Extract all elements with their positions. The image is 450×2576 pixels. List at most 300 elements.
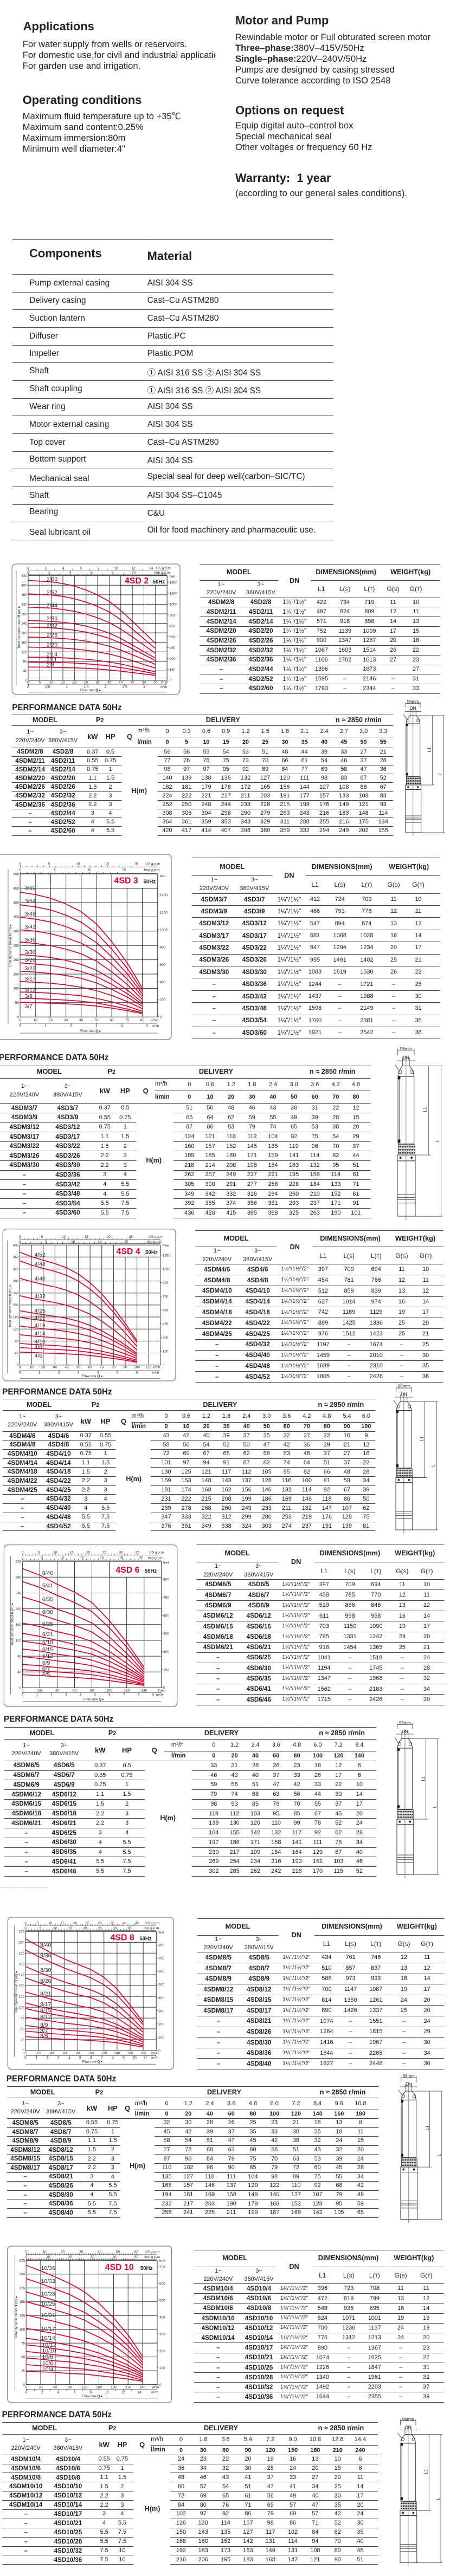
table: 4SD 4 model dimensions and weight: – [400, 1373, 403, 1380]
table: 4SD 10 performance data: 5.5 [118, 2520, 126, 2526]
table: 4SD 10 performance data: 35 [335, 2502, 341, 2508]
table: 4SD 3 performance data: 249 [226, 1171, 236, 1178]
table: 4SD 8 performance data: 51 [293, 2146, 299, 2153]
chart: 4SD 2 performance curves: 5 [38, 681, 41, 685]
table: 4SD 3 performance data: 195 [289, 1171, 299, 1178]
table: 4SD 4 performance data: 3 [104, 1477, 107, 1484]
chart: 4SD 10 performance curves: 4 [57, 2391, 60, 2395]
chart: 4SD 10 performance curves: 10/36 [41, 2266, 55, 2272]
table: 4SD 4 performance data: 4SDM4/25 [8, 1487, 37, 1494]
table: 4SD 10 performance data: 1.5 [118, 2474, 126, 2481]
table: 4SD 8 performance data: 75 [249, 2156, 256, 2162]
table: 4SD 10 performance data: 7.5 [100, 2547, 108, 2554]
table: 4SD 4 model dimensions and weight: 1336 [370, 1320, 383, 1326]
pump drawing: 4SD 6: L [433, 1805, 437, 1808]
table: 4SD 3 performance data: 133 [331, 1181, 340, 1188]
table: 4SD 8 model dimensions and weight: 510 [322, 1965, 331, 1971]
table: 4SD 10 model dimensions and weight: 4SD10/6 [247, 2295, 271, 2302]
table: 4SD 3 model dimensions and weight: 681 [310, 932, 320, 939]
table: 4SD 2 performance data: 55 [203, 749, 210, 755]
table: 4SD 3 performance data: 12 [352, 1105, 359, 1111]
chart: 4SD 4 performance curves: 4/32 [35, 1294, 46, 1300]
text block: applications: For water supply from wells or reservoirs. [23, 39, 187, 49]
table: 4SD 10 performance data: 4SD10/36 [54, 2556, 82, 2564]
chart: 4SD 10 performance curves: 200 [19, 2273, 25, 2276]
table: 4SD 8 performance data: 75 [314, 2173, 321, 2180]
chart: 4SD 2 performance curves: 2/52 [47, 590, 57, 596]
table: 4SD 6 performance data: kW [95, 1746, 105, 1754]
label: H(m) for 4SD 2: H(m) [131, 787, 147, 795]
chart: 4SD 2 performance curves: 1 [66, 685, 68, 689]
chart: 4SD 3 performance curves: 20 [49, 1018, 53, 1022]
table: 4SD 10 performance data: 20 [245, 2456, 252, 2462]
table: 4SD 4 performance data: kW [81, 1417, 91, 1425]
table: 4SD 10 performance data: P2 [108, 2424, 116, 2432]
table: 4SD 8 performance data: 107 [313, 2191, 323, 2198]
chart: 4SD 6 performance curves: 5 [94, 1693, 96, 1697]
table: 4SD 6 performance data: 158 [271, 1839, 281, 1846]
table: 4SD 8 model dimensions and weight: 3~ [255, 1936, 262, 1943]
table: 4SD 6 performance data: DELIVERY [204, 1729, 239, 1737]
table: 4SD 6 performance data: 4SD6/9 [54, 1781, 75, 1788]
table: 4SD 8 performance data: 3.6 [227, 2100, 235, 2107]
table: 4SD 4 model dimensions and weight: 1~ [214, 1248, 220, 1254]
table: 4SD 4 model dimensions and weight: – [400, 1352, 403, 1359]
table: 4SD 8 performance data: 4SD8/40 [49, 2209, 73, 2216]
table: 4SD 4 model dimensions and weight: 25 [398, 1320, 405, 1326]
table: 4SD 8 performance data: 225 [205, 2209, 215, 2216]
table: 4SD 2 performance data: 252 [162, 801, 172, 808]
table: 4SD 3 model dimensions and weight: – [392, 1029, 395, 1036]
chart: 4SD 2 performance curves: 25 [84, 681, 88, 685]
table: 4SD 2 performance data: kW [87, 732, 98, 741]
chart: 4SD 6 performance curves: 7 [123, 1693, 125, 1697]
text block: operating conditions [23, 111, 181, 154]
table: 4SD 10 performance data: 127 [243, 2529, 253, 2535]
table: 4SD 6 model dimensions and weight: 4SDM6/21 [203, 1644, 233, 1651]
table: 4SD 4 performance data: 116 [282, 1477, 291, 1484]
table: 4SD 2 performance data: 93 [380, 801, 387, 808]
chart: 4SD 8 performance curves: Flow rate Q ▸ [82, 2060, 103, 2064]
table: 4SD 8 model dimensions and weight [197, 1918, 445, 2069]
table: 4SD 10 model dimensions and weight: 1312 [342, 2334, 355, 2341]
table: 4SD 3 performance data: 46 [249, 1105, 255, 1111]
chart: 4SD 6 performance curves: 0 [22, 1556, 24, 1560]
table: 4SD 2 performance data: 156 [280, 784, 290, 790]
chart: 4SD 8 performance curves: 400 [158, 1996, 164, 2000]
table: 4SD 8 model dimensions and weight: 761 [345, 1954, 356, 1961]
table: 4SD 2 model dimensions and weight: 1¼"/1½" [282, 637, 306, 644]
pump drawing: 4SD 3 [395, 1047, 442, 1221]
table: 4SD 4 performance data: 0.6 [182, 1413, 190, 1419]
table: 4SD 3 performance data: 83 [228, 1124, 234, 1130]
chart: 4SD 4 performance curves: 0 [163, 1364, 165, 1367]
text block: motor and pump: Curve tolerance according to ISO 2548 [235, 75, 391, 86]
chart: 4SD 6 performance curves: 30 [119, 1550, 123, 1554]
table: components and material: Wear ring [29, 402, 66, 411]
table: 4SD 2 model dimensions and weight: 1287 [363, 637, 376, 644]
table: 4SD 8 performance data: 4 [111, 2173, 114, 2180]
pump drawing: 4SD 3: L [435, 1139, 440, 1142]
table: 4SD 3 performance data: 118 [226, 1133, 236, 1140]
table: 4SD 8 model dimensions and weight: 1147 [344, 1986, 357, 1993]
table: 4SD 3 model dimensions and weight: – [213, 1005, 216, 1012]
table: 4SD 10 model dimensions and weight: 4SDM10/10 [202, 2315, 235, 2322]
chart: 4SD 2 performance curves: 10 [114, 567, 118, 570]
chart: 4SD 8 performance curves: 50Hz [139, 1936, 152, 1942]
table: 4SD 4 performance data: 60 [284, 1423, 290, 1430]
table: 4SD 10 performance data: 49 [290, 2493, 296, 2499]
chart: 4SD 4 performance curves: 15 [98, 1240, 102, 1244]
table: 4SD 6 performance data: 103 [333, 1858, 343, 1865]
chart: 4SD 4 performance curves: Feet [163, 1244, 170, 1248]
table: 4SD 4 performance data: 59 [344, 1477, 350, 1484]
pump drawing: 4SD 8: L [436, 2153, 441, 2156]
table: 4SD 3 performance data: 20 [352, 1124, 359, 1130]
table: 4SD 4 model dimensions and weight: 220V/240V [202, 1256, 232, 1263]
chart: 4SD 8 performance curves: 30 [98, 1922, 102, 1925]
table: 4SD 6 performance data: 5.5 [123, 1839, 131, 1846]
table: 4SD 4 performance data: 67 [203, 1450, 210, 1457]
table: 4SD 3 model dimensions and weight: 220V/240V [200, 885, 229, 892]
table: 4SD 4 performance data: 32 [284, 1432, 290, 1439]
table: 4SD 2 performance data: 44 [301, 749, 308, 755]
table: 4SD 3 performance data: 4 [124, 1171, 127, 1178]
table: 4SD 3 performance data: 114 [310, 1152, 319, 1159]
table: 4SD 10 model dimensions and weight: G(S) [395, 2272, 407, 2279]
table: 4SD 6 model dimensions and weight: MODEL [225, 1549, 249, 1557]
table: 4SD 4 model dimensions and weight: 1425 [342, 1320, 356, 1326]
table: 4SD 6 performance data: 1.5 [96, 1801, 104, 1807]
chart: 4SD 3 performance curves: 3/48 [24, 911, 36, 917]
table: 4SD 10 performance data: 149 [266, 2547, 275, 2554]
chart: 4SD 3 performance curves: 1000 [160, 928, 168, 932]
table: 4SD 8 performance data: 4SD8/21 [49, 2173, 73, 2180]
table: 4SD 2 model dimensions and weight: 1~ [218, 581, 224, 588]
chart: 4SD 4 performance curves: 750 [163, 1295, 169, 1299]
chart: 4SD 8 performance curves: 5 [79, 2056, 81, 2060]
chart: 4SD 10 performance curves: 10/6 [42, 2361, 53, 2367]
table: 4SD 8 performance data: 58 [163, 2137, 170, 2144]
chart: 4SD 4 performance curves: 240 [13, 1292, 19, 1295]
table: 4SD 8 performance data: 65 [357, 2209, 364, 2216]
chart: 4SD 2 performance curves: 0.5 [45, 685, 50, 689]
table: 4SD 10 performance data: 57 [290, 2502, 296, 2508]
table: 4SD 4 performance data: 86 [344, 1496, 350, 1502]
chart: 4SD 10 performance curves: 0 [25, 2250, 27, 2254]
table: 4SD 8 performance data: 4 [90, 2191, 94, 2198]
table: 4SD 4 performance data: 112 [242, 1469, 251, 1475]
table: 4SD 3 performance data: 4SD3/36 [55, 1171, 80, 1178]
table: 4SD 2 performance data: 4SD2/11 [51, 757, 75, 764]
table: 4SD 6 performance data: 254 [230, 1858, 240, 1865]
chart: 4SD 10 performance curves: 20 [68, 2255, 73, 2259]
chart: 4SD 2 performance curves: 600 [170, 635, 176, 639]
table: 4SD 8 performance data: 190 [227, 2201, 236, 2207]
table: 4SD 8 performance data: 8.4 [313, 2100, 322, 2107]
table: 4SD 6 performance data: 44 [314, 1791, 321, 1798]
chart: 4SD 4 performance curves: 4 [97, 1371, 99, 1375]
table: 4SD 8 performance data: 72 [185, 2146, 191, 2153]
chart: 4SD 10 performance curves: 175 [19, 2287, 25, 2291]
table: 4SD 8 model dimensions and weight: 1¼"/1½"/2" [282, 2039, 310, 2045]
table: components and material: Motor external casing [29, 420, 109, 429]
table: 4SD 4 performance data: 3.0 [262, 1413, 271, 1419]
table: 4SD 3 performance data: 305 [184, 1181, 194, 1188]
table: 4SD 8 model dimensions and weight: 857 [345, 1965, 356, 1971]
table: 4SD 6 performance data: 95 [273, 1811, 279, 1817]
table: 4SD 2 performance data: 0 [165, 739, 169, 745]
table: 4SD 2 performance data: 55 [380, 739, 387, 745]
table: 4SD 3 model dimensions and weight: – [338, 981, 342, 988]
table: 4SD 10 performance data: 1.8 [199, 2436, 207, 2443]
table: 4SD 8 model dimensions and weight: 1¼"/1½"/2" [282, 1986, 310, 1992]
table: 4SD 4 model dimensions and weight: 766 [371, 1277, 381, 1283]
table: 4SD 10 performance data: 131 [288, 2547, 298, 2554]
chart: 4SD 8 performance curves: 9 [123, 2056, 125, 2060]
table: 4SD 6 performance data [4, 1727, 376, 1877]
table: 4SD 3 performance data: 185 [205, 1152, 215, 1159]
table: 4SD 10 model dimensions and weight: – [347, 2384, 350, 2390]
table: 4SD 6 performance data: – [24, 1829, 28, 1837]
table: 4SD 6 model dimensions and weight: 1331 [343, 1633, 357, 1640]
table: 4SD 10 performance data: 16 [290, 2456, 296, 2462]
table: 4SD 4 model dimensions and weight: 454 [318, 1277, 328, 1283]
table: 4SD 6 model dimensions and weight: 16 [399, 1613, 406, 1619]
table: 4SD 10 performance data: 84 [312, 2529, 318, 2535]
chart: 4SD 6 performance curves: 160 [16, 1623, 22, 1627]
table: 4SD 6 model dimensions and weight: L(T) [370, 1567, 381, 1575]
table: 4SD 10 performance data: 107 [243, 2520, 253, 2526]
table: 4SD 6 model dimensions and weight: 694 [371, 1581, 381, 1588]
table: 4SD 4 performance data: 4SD4/14 [46, 1459, 71, 1467]
table: 4SD 8 performance data: 203 [205, 2201, 215, 2207]
table: 4SD 10 performance data: 79 [267, 2510, 274, 2517]
table: 4SD 10 performance data: 45 [357, 2547, 364, 2554]
table: 4SD 6 model dimensions and weight: 1518 [369, 1654, 382, 1661]
chart: 4SD 6 performance curves: 900 [163, 1578, 169, 1582]
table: 4SD 3 model dimensions and weight: 4SDM3/17 [199, 932, 229, 939]
chart: 4SD 10 performance curves: 200 [159, 2350, 165, 2353]
table: 4SD 3 performance data: 392 [184, 1200, 194, 1206]
table: 4SD 2 performance data: 288 [300, 819, 310, 825]
table: 4SD 8 performance data: 129 [248, 2182, 258, 2189]
chart: 4SD 6 performance curves: 6/5 [42, 1672, 50, 1678]
table: 4SD 2 performance data: 3.0 [359, 728, 368, 735]
table: 4SD 3 performance data: 82 [332, 1152, 339, 1159]
chart: 4SD 8 performance curves: Total dynamic head H (m) ▸ [15, 1971, 18, 2014]
table: 4SD 6 performance data: 110 [272, 1820, 281, 1826]
table: 4SD 8 model dimensions and weight: 1967 [369, 2039, 382, 2046]
chart: 4SD 2 performance curves: 2.5 [123, 685, 127, 689]
table: components and material: AISI 304 SS [147, 420, 193, 429]
table: 4SD 6 model dimensions and weight: 24 [423, 1654, 430, 1661]
pump drawing: 4SD 4: DN [401, 1392, 407, 1397]
table: 4SD 3 performance data: 0.37 [99, 1105, 111, 1111]
chart: 4SD 6 performance curves: Flow rate Q ▸ [83, 1698, 104, 1702]
table: 4SD 2 performance data: 248 [201, 801, 211, 808]
table: 4SD 10 performance data: 90 [335, 2556, 341, 2563]
table: 4SD 4 performance data: 380V/415V [44, 1422, 73, 1428]
chart: 4SD 2 performance curves: Imp g.p.m [154, 571, 170, 575]
table: 4SD 3 performance data: 61 [352, 1171, 359, 1178]
table: 4SD 2 performance data: 3 [91, 810, 94, 816]
table: 4SD 3 model dimensions and weight: 1244 [308, 981, 322, 988]
table: 4SD 6 performance data: 1~ [23, 1742, 30, 1749]
table: 4SD 3 model dimensions and weight: 4SD3/9 [244, 908, 265, 915]
table: 4SD 10 model dimensions and weight: 1001 [368, 2315, 381, 2321]
table: 4SD 2 performance data: 294 [319, 827, 329, 834]
table: 4SD 2 performance data: 97 [203, 766, 210, 773]
table: 4SD 2 performance data: 2 [109, 784, 112, 790]
chart: 4SD 10 performance curves: 0 [159, 2383, 162, 2387]
chart: 4SD 8 performance curves: 45 [135, 1922, 139, 1925]
chart: 4SD 10 performance curves: 10/4 [42, 2367, 53, 2373]
table: 4SD 4 performance data: 58 [263, 1450, 270, 1457]
chart: 4SD 6 performance curves: 4SD 6 [115, 1566, 140, 1575]
table: 4SD 10 performance data: 183 [198, 2547, 208, 2554]
chart: 4SD 3 performance curves: 5 [146, 1024, 149, 1028]
table: 4SD 4 performance data: 4SDM4/6 [9, 1432, 36, 1439]
table: 4SD 4 performance data: 220V/240V [8, 1422, 37, 1428]
table: 4SD 2 model dimensions and weight: 11 [390, 599, 396, 606]
table: 4SD 6 model dimensions and weight: – [349, 1686, 352, 1692]
table: 4SD 6 model dimensions and weight: 1150 [344, 1623, 356, 1630]
table: 4SD 6 model dimensions and weight: 958 [371, 1613, 381, 1619]
table: 4SD 6 performance data: 31 [232, 1762, 238, 1769]
table: 4SD 4 performance data: 40 [243, 1423, 250, 1430]
table: 4SD 2 performance data: 0.6 [202, 728, 210, 735]
table: 4SD 2 performance data: 216 [339, 819, 349, 825]
chart: 4SD 4 performance curves: 4/48 [35, 1262, 46, 1268]
table: 4SD 2 performance data: 183 [339, 810, 349, 816]
chart: 4SD 2 performance curves: 12 [132, 567, 136, 570]
table: 4SD 10 performance data: 24 [290, 2465, 296, 2471]
table: 4SD 6 performance data: 4SDM6/5 [13, 1762, 40, 1769]
chart: 4SD 10 performance curves: 50 [116, 2250, 120, 2254]
table: 4SD 8 performance data: 169 [291, 2209, 301, 2216]
table: 4SD 4 performance data: 4 [104, 1496, 107, 1502]
table: 4SD 4 performance data: Q [121, 1417, 126, 1425]
table: 4SD 4 performance data: 2 [104, 1469, 107, 1475]
table: 4SD 8 performance data: 199 [248, 2209, 258, 2216]
chart: 4SD 3 performance curves: 15 [105, 862, 109, 866]
table: 4SD 10 performance data: 84 [178, 2502, 184, 2508]
chart: 4SD 2 performance curves: 0 [170, 679, 172, 683]
table: 4SD 2 model dimensions and weight: 4SD2/8 [250, 599, 271, 606]
table: 4SD 2 performance data: 108 [358, 793, 369, 799]
table: 4SD 4 performance data: 211 [282, 1505, 291, 1511]
table: 4SD 2 model dimensions and weight: 1396 [315, 666, 328, 672]
table: 4SD 4 performance data: – [21, 1514, 24, 1521]
table: 4SD 4 performance data: 208 [222, 1496, 232, 1502]
table: 4SD 2 performance data: 148 [358, 810, 369, 816]
chart: 4SD 3 performance curves: 50 [94, 1018, 99, 1022]
table: 4SD 6 model dimensions and weight: 20 [423, 1633, 430, 1640]
table: 4SD 8 performance data: 26 [228, 2119, 235, 2126]
table: 4SD 4 performance data: 4SD4/8 [48, 1441, 69, 1448]
chart: 4SD 6 performance curves: 6 [108, 1693, 111, 1697]
table: 4SD 10 performance data: 4SD10/10 [54, 2483, 82, 2490]
chart: 4SD 2 performance curves: 35 [107, 681, 111, 685]
table: 4SD 8 performance data: 232 [162, 2201, 172, 2207]
table: 4SD 4 performance data: 4SDM4/14 [8, 1459, 37, 1467]
table: 4SD 4 performance data: 146 [302, 1496, 312, 1502]
table: 4SD 2 performance data: 144 [300, 784, 310, 790]
chart: 4SD 6 performance curves: 80 [17, 1654, 22, 1658]
table: 4SD 2 model dimensions and weight: 23 [413, 657, 419, 663]
table: 4SD 4 performance data: 92 [324, 1487, 330, 1493]
table: 4SD 10 performance data: 42 [335, 2510, 341, 2517]
table: 4SD 4 model dimensions and weight: G(S) [395, 1252, 408, 1260]
table: 4SD 8 performance data: 149 [248, 2191, 258, 2198]
table: 4SD 4 performance data: 1~ [19, 1413, 26, 1420]
chart: 4SD 6 performance curves: 10 [53, 1550, 57, 1554]
table: 4SD 10 model dimensions and weight: 895 [370, 2305, 380, 2312]
table: 4SD 10 model dimensions and weight: 4SD10/21 [245, 2354, 273, 2361]
table: 4SD 3 model dimensions and weight: L(T) [361, 881, 372, 888]
chart: 4SD 2 performance curves: 0 [25, 679, 27, 683]
chart: 4SD 10 performance curves: Total dynamic head H (m) ▸ [15, 2296, 18, 2339]
chart: 4SD 8 performance curves: 5 [37, 1922, 39, 1925]
table: 4SD 10 model dimensions and weight: 1¼"/1½"/2" [280, 2364, 308, 2370]
table: 4SD 3 performance data: 189 [184, 1152, 194, 1159]
table: 4SD 3 model dimensions and weight: 894 [335, 920, 345, 927]
table: 4SD 2 performance data: 364 [162, 819, 172, 825]
chart: 4SD 3 performance curves: 5 [54, 868, 56, 872]
table: 4SD 6 performance data: 52 [356, 1868, 363, 1874]
chart: 4SD 6 performance curves: 20 [38, 1689, 42, 1692]
table: 4SD 8 model dimensions and weight: 1815 [369, 2028, 382, 2035]
table: 4SD 4 performance data: 40 [203, 1432, 210, 1439]
chart: 4SD 3 performance curves: 40 [79, 1018, 83, 1022]
table: 4SD 4 performance data: 100 [302, 1477, 312, 1484]
table: 4SD 4 performance data: 52 [223, 1442, 230, 1448]
table: 4SD 3 performance data: 91 [352, 1200, 359, 1206]
chart: 4SD 2 performance curves: 4 [69, 571, 72, 575]
table: 4SD 4 model dimensions and weight: 11 [398, 1266, 405, 1273]
table: 4SD 3 performance data: 4SDM3/7 [11, 1105, 37, 1112]
table: 4SD 8 performance data: 90 [185, 2156, 191, 2162]
table: 4SD 4 performance data: 4SD4/25 [46, 1487, 71, 1494]
table: 4SD 6 performance data: 67 [314, 1811, 321, 1817]
table: 4SD 4 performance data: 30 [223, 1423, 230, 1430]
table: 4SD 3 model dimensions and weight: 1068 [333, 932, 346, 939]
table: 4SD 4 performance data: 0.55 [100, 1432, 111, 1439]
table: 4SD 6 performance data: 12 [335, 1762, 342, 1769]
chart: 4SD 8 performance curves: 250 [18, 1941, 24, 1945]
table: 4SD 10 performance data: 4SDM10/10 [9, 2483, 42, 2490]
table: 4SD 10 model dimensions and weight: 396 [318, 2285, 327, 2292]
table: 4SD 10 model dimensions and weight: 548 [318, 2305, 327, 2312]
heading: performance data 4SD 10: PERFORMANCE DATA 50Hz [2, 2410, 112, 2419]
table: 4SD 4 performance data: 299 [242, 1514, 252, 1520]
table: 4SD 8 model dimensions and weight: 4SD8/26 [247, 2028, 271, 2035]
table: 4SD 10 model dimensions and weight: 4SD10/32 [245, 2384, 273, 2391]
heading: warranty: Warranty: 1 year [235, 171, 331, 185]
table: 4SD 6 performance data: 140 [355, 1753, 364, 1759]
table: 4SD 10 model dimensions and weight: 1367 [368, 2345, 381, 2351]
table: 4SD 10 performance data: 13 [312, 2456, 318, 2462]
table: 4SD 2 model dimensions and weight: – [391, 676, 395, 682]
table: 4SD 4 model dimensions and weight: 1¼"/1½"/2" [281, 1373, 308, 1379]
table: 4SD 3 performance data: 331 [268, 1200, 278, 1206]
table: 4SD 3 performance data: 4SDM3/22 [10, 1143, 39, 1150]
table: 4SD 6 performance data: – [24, 1858, 28, 1865]
table: 4SD 10 performance data: 65 [267, 2502, 274, 2508]
chart: 4SD 8 performance curves: 8/15 [40, 2008, 52, 2014]
table: 4SD 8 performance data: 3 [111, 2164, 114, 2171]
